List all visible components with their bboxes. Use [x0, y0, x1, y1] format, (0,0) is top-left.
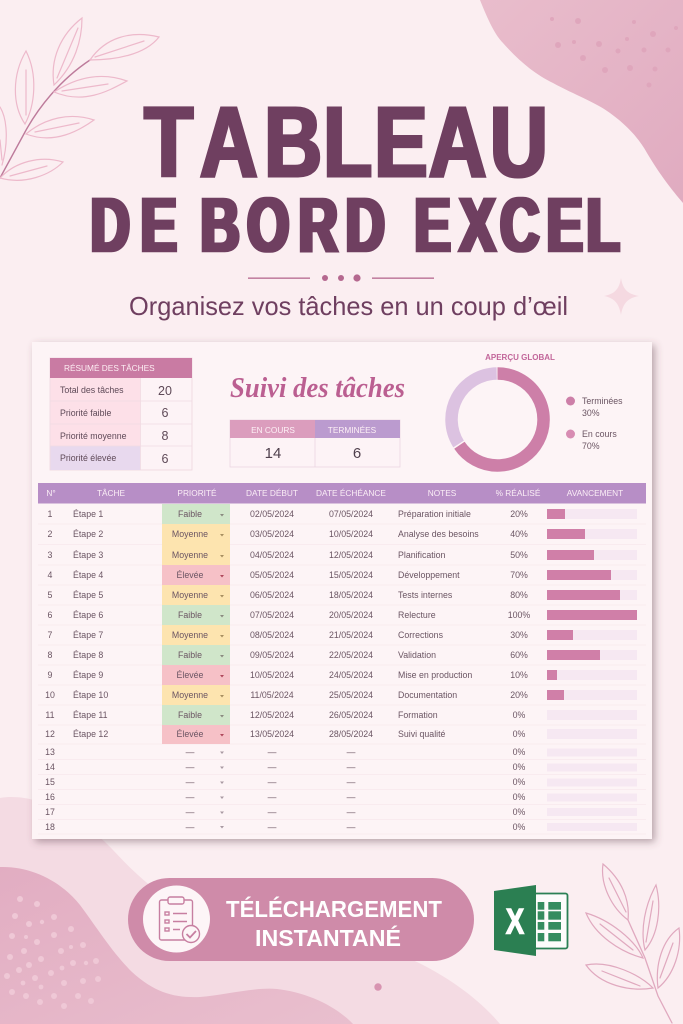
row 17 [45, 807, 637, 817]
icon: sparkle [604, 278, 639, 315]
row 10: 25/05/2024 [329, 690, 373, 700]
row 13: — [347, 747, 356, 757]
button text: INSTANTANÉ [255, 924, 401, 951]
row 15: 0% [513, 777, 526, 787]
row 2: 40% [510, 529, 528, 539]
donut heading: APERÇU GLOBAL [485, 353, 555, 362]
table header: TÂCHE [97, 488, 126, 498]
status: terminees [328, 425, 377, 462]
row 15: 15 [45, 777, 55, 787]
row 2: 03/05/2024 [250, 529, 294, 539]
row 13: 0% [513, 747, 526, 757]
row 3: 04/05/2024 [250, 550, 294, 560]
row 15: — [186, 777, 195, 787]
summary row: total [60, 384, 172, 398]
table header [38, 483, 646, 504]
shape: bottom left light blob [0, 797, 500, 1024]
icon: excel logo: X [506, 902, 524, 942]
panel: summary table [50, 358, 192, 470]
row 1: Faible [178, 509, 202, 519]
row 5: Tests internes [398, 590, 453, 600]
row 18: — [347, 822, 356, 832]
row 2 [48, 524, 637, 544]
row 17: 17 [45, 807, 55, 817]
row 10: 11/05/2024 [250, 690, 294, 700]
row 3: 50% [510, 550, 528, 560]
row 10: Documentation [398, 690, 457, 700]
row 10: 20% [510, 690, 528, 700]
row 11: Formation [398, 710, 438, 720]
row 17: — [268, 807, 277, 817]
donut legend: En cours [582, 429, 617, 439]
row 4: 15/05/2024 [329, 570, 373, 580]
status: terminees: TERMINÉES [328, 425, 377, 435]
row 11: 0% [513, 710, 526, 720]
row 12: Suivi qualité [398, 729, 446, 739]
row 1: 1 [48, 509, 53, 519]
row 12: 13/05/2024 [250, 729, 294, 739]
row 8: 22/05/2024 [329, 650, 373, 660]
icon: excel logo [494, 885, 568, 956]
row 1: 02/05/2024 [250, 509, 294, 519]
summary heading: RÉSUMÉ DES TÂCHES [64, 363, 155, 373]
row 9: Mise en production [398, 670, 472, 680]
row 4: 4 [48, 570, 53, 580]
row 9: 9 [48, 670, 53, 680]
row 16: 16 [45, 792, 55, 802]
row 12 [45, 725, 637, 744]
row 11: 12/05/2024 [250, 710, 294, 720]
row 14: — [347, 762, 356, 772]
row 11: Faible [178, 710, 202, 720]
row 15: — [347, 777, 356, 787]
row 6: 07/05/2024 [250, 610, 294, 620]
subtitle: Organisez vos tâches en un coup d’œil [129, 291, 568, 321]
status: terminees: 6 [353, 445, 361, 462]
row 7: Corrections [398, 630, 444, 640]
row 7: 7 [48, 630, 53, 640]
shape: bottom left dark blob [0, 867, 353, 1024]
row 7: 21/05/2024 [329, 630, 373, 640]
title line 2: DE BORD EXCEL [91, 183, 620, 269]
download button [128, 878, 474, 961]
table rows [38, 504, 646, 834]
row 4: 70% [510, 570, 528, 580]
row 12: 28/05/2024 [329, 729, 373, 739]
row 2: Moyenne [172, 529, 208, 539]
row 1: 07/05/2024 [329, 509, 373, 519]
row 10: Étape 10 [73, 690, 108, 700]
row 1 [48, 504, 637, 524]
row 18: 0% [513, 822, 526, 832]
summary row: low priority [60, 406, 169, 420]
row 12: 0% [513, 729, 526, 739]
row 4: Élevée [177, 570, 204, 580]
script heading: Suivi des tâches [230, 372, 405, 404]
row 8: Validation [398, 650, 436, 660]
shape: top right blob [480, 0, 683, 203]
row 3: Moyenne [172, 550, 208, 560]
summary row: medium priority [60, 429, 169, 443]
row 16: — [186, 792, 195, 802]
summary row: medium priority: Priorité moyenne [60, 431, 127, 441]
row 5: Étape 5 [73, 590, 103, 600]
table header: PRIORITÉ [177, 488, 217, 498]
summary row: low priority: 6 [162, 406, 169, 420]
row 7: 30% [510, 630, 528, 640]
row 6: 20/05/2024 [329, 610, 373, 620]
row 13: 13 [45, 747, 55, 757]
row 5: 5 [48, 590, 53, 600]
button text: TÉLÉCHARGEMENT [226, 895, 442, 922]
row 8: 60% [510, 650, 528, 660]
row 18: 18 [45, 822, 55, 832]
row 4 [48, 565, 637, 585]
row 4: 05/05/2024 [250, 570, 294, 580]
row 11 [45, 705, 637, 725]
row 11: Étape 11 [73, 710, 108, 720]
row 4: Étape 4 [73, 570, 103, 580]
row 14: — [268, 762, 277, 772]
row 17: — [347, 807, 356, 817]
donut legend: 70% [582, 441, 600, 451]
row 17: 0% [513, 807, 526, 817]
row 9: Étape 9 [73, 670, 103, 680]
panel: status table [230, 420, 400, 467]
row 7: Moyenne [172, 630, 208, 640]
row 2: 2 [48, 529, 53, 539]
panel: dashboard card [32, 342, 652, 839]
table header: NOTES [428, 488, 457, 498]
row 3: 3 [48, 550, 53, 560]
row 14: — [186, 762, 195, 772]
row 14: 14 [45, 762, 55, 772]
donut chart [452, 373, 544, 465]
row 18 [45, 822, 637, 832]
table header: DATE DÉBUT [246, 488, 298, 498]
row 5: 18/05/2024 [329, 590, 373, 600]
row 15 [45, 777, 637, 787]
row 3: Étape 3 [73, 550, 103, 560]
row 4: Développement [398, 570, 460, 580]
row 9: Élevée [177, 670, 204, 680]
row 7: Étape 7 [73, 630, 103, 640]
row 7: 08/05/2024 [250, 630, 294, 640]
row 16: — [268, 792, 277, 802]
row 13 [45, 747, 637, 757]
row 5: Moyenne [172, 590, 208, 600]
row 6 [48, 605, 637, 625]
row 16 [45, 792, 637, 802]
row 12: Étape 12 [73, 729, 108, 739]
row 2: Analyse des besoins [398, 529, 479, 539]
decorative dot [374, 983, 382, 991]
row 5 [48, 585, 637, 605]
summary row: high priority: 6 [162, 452, 169, 466]
row 18: — [186, 822, 195, 832]
row 6: Relecture [398, 610, 436, 620]
row 13: — [186, 747, 195, 757]
table header: AVANCEMENT [567, 488, 623, 498]
row 1: Étape 1 [73, 509, 103, 519]
row 3: 12/05/2024 [329, 550, 373, 560]
row 2: 10/05/2024 [329, 529, 373, 539]
row 9: 10/05/2024 [250, 670, 294, 680]
icon: clipboard with check [143, 886, 210, 952]
row 11: 26/05/2024 [329, 710, 373, 720]
title line 1: TABLEAU [144, 87, 548, 198]
row 6: Faible [178, 610, 202, 620]
row 7 [48, 625, 637, 645]
status: en cours [251, 425, 295, 462]
summary row: low priority: Priorité faible [60, 408, 111, 418]
row 6: 100% [508, 610, 530, 620]
row 1: 20% [510, 509, 528, 519]
row 5: 80% [510, 590, 528, 600]
status: en cours: EN COURS [251, 425, 295, 435]
row 15: — [268, 777, 277, 787]
row 8: Étape 8 [73, 650, 103, 660]
donut legend [566, 396, 623, 451]
row 18: — [268, 822, 277, 832]
table header: % RÉALISÉ [496, 488, 541, 498]
status: en cours: 14 [265, 445, 281, 462]
summary row: total: Total des tâches [60, 385, 124, 395]
row 8: 09/05/2024 [250, 650, 294, 660]
row 1: Préparation initiale [398, 509, 471, 519]
row 10: 10 [45, 690, 55, 700]
row 8: Faible [178, 650, 202, 660]
row 12: Élevée [177, 729, 204, 739]
icon: leaf branch bottom right [586, 864, 680, 1023]
row 6: 6 [48, 610, 53, 620]
row 9: 24/05/2024 [329, 670, 373, 680]
summary row: medium priority: 8 [162, 429, 169, 443]
donut legend: Terminées [582, 396, 623, 406]
row 8: 8 [48, 650, 53, 660]
summary row: high priority: Priorité élevée [60, 453, 116, 463]
row 11: 11 [45, 710, 55, 720]
row 3: Planification [398, 550, 446, 560]
row 9 [48, 665, 637, 685]
row 16: — [347, 792, 356, 802]
row 2: Étape 2 [73, 529, 103, 539]
row 17: — [186, 807, 195, 817]
icon: leaf branch top left [0, 18, 159, 180]
row 6: Étape 6 [73, 610, 103, 620]
row 10: Moyenne [172, 690, 208, 700]
donut legend: 30% [582, 408, 600, 418]
table header: DATE ÉCHÉANCE [316, 488, 386, 498]
row 8 [48, 645, 637, 665]
row 10 [45, 685, 637, 705]
summary row: total: 20 [158, 384, 172, 398]
row 13: — [268, 747, 277, 757]
row 5: 06/05/2024 [250, 590, 294, 600]
button text [226, 895, 442, 951]
row 9: 10% [510, 670, 528, 680]
summary row: high priority [60, 452, 169, 466]
divider with dots [248, 274, 434, 282]
row 14 [45, 762, 637, 772]
table header: N° [46, 488, 56, 498]
row 16: 0% [513, 792, 526, 802]
row 14: 0% [513, 762, 526, 772]
row 3 [48, 544, 637, 565]
row 12: 12 [45, 729, 55, 739]
